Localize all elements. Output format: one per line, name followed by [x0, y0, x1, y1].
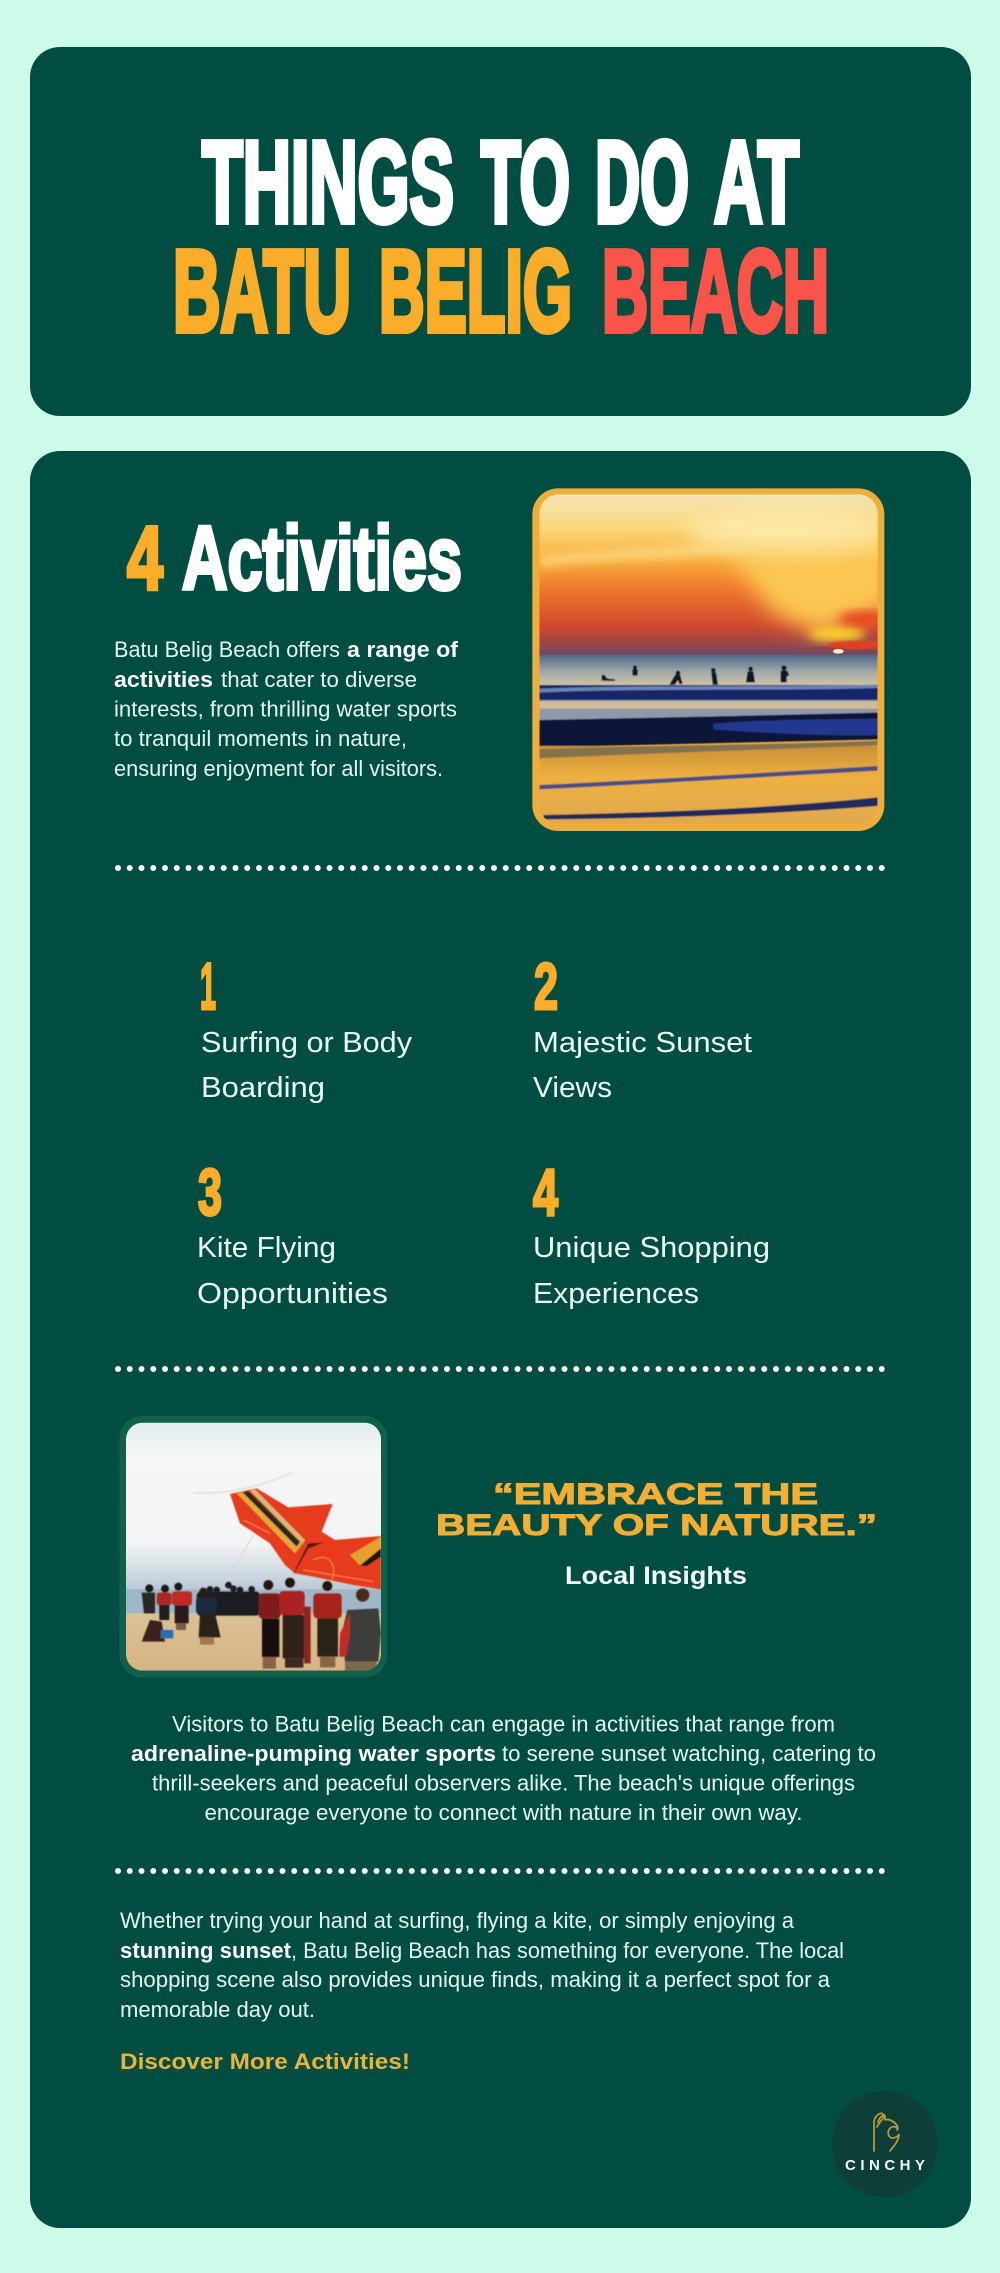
quote: BEAUTY OF NATURE.” — [436, 1509, 877, 1542]
closing paragraph — [120, 1908, 844, 2022]
activity 1 — [200, 949, 413, 1104]
photo: surfers at sunset — [532, 488, 900, 831]
centered paragraph — [131, 1712, 876, 1825]
intro paragraph: Batu Belig Beach offers — [114, 637, 340, 662]
centered paragraph: encourage everyone to connect with nature in their own way. — [204, 1800, 802, 1825]
crowd — [197, 1582, 260, 1616]
divider — [118, 1868, 883, 1874]
closing paragraph: memorable day out. — [120, 1997, 315, 2022]
activity 3: Kite Flying — [197, 1232, 336, 1264]
quote: “EMBRACE THE — [493, 1478, 818, 1511]
photo: kite flying — [119, 1416, 387, 1677]
surfers — [586, 665, 789, 685]
intro paragraph: a range of — [347, 637, 459, 662]
activity 1: Boarding — [201, 1072, 325, 1104]
activity 3: 3 — [198, 1155, 222, 1229]
intro paragraph: ensuring enjoyment for all visitors. — [114, 756, 443, 781]
activity 2 — [533, 949, 752, 1104]
icon: hand gesture — [874, 2113, 899, 2151]
panel: title — [30, 47, 971, 416]
quote source: Local Insights — [565, 1562, 747, 1590]
call to action: Discover More Activities! — [120, 2049, 410, 2074]
activity 4: Experiences — [533, 1278, 699, 1310]
activity 3: Opportunities — [197, 1278, 388, 1310]
activity 2: Majestic Sunset — [533, 1027, 752, 1059]
divider — [118, 865, 883, 871]
activity list — [197, 949, 770, 1310]
intro paragraph: that cater to diverse — [221, 667, 417, 692]
intro paragraph: activities — [114, 667, 213, 692]
activity 4: Unique Shopping — [533, 1232, 770, 1264]
heading: 4 activities — [127, 509, 462, 609]
title line 1: THINGS — [202, 117, 454, 247]
centered paragraph: thrill-seekers and peaceful observers alike. The beach's unique offerings — [152, 1770, 855, 1796]
closing paragraph: shopping scene also provides unique finds, making it a perfect spot for a — [120, 1967, 831, 1992]
logo: cinchy: CINCHY — [845, 2157, 925, 2174]
activity 4: 4 — [533, 1155, 558, 1229]
centered paragraph: to serene sunset watching, catering to — [502, 1741, 876, 1766]
title line 1: TO — [481, 117, 570, 247]
closing paragraph: stunning sunset — [120, 1938, 292, 1963]
heading: 4 activities: 4 — [127, 509, 163, 609]
centered paragraph: Visitors to Batu Belig Beach can engage in activities that range from — [172, 1712, 835, 1736]
logo: cinchy — [832, 2091, 938, 2197]
activity 2: 2 — [534, 949, 558, 1023]
closing paragraph: , Batu Belig Beach has something for everyone. The local — [291, 1938, 844, 1963]
title line 1: DO — [595, 117, 689, 247]
closing paragraph: Whether trying your hand at surfing, flying a kite, or simply enjoying a — [120, 1908, 795, 1933]
activity 2: Views — [533, 1072, 612, 1104]
heading: 4 activities: Activities — [182, 509, 462, 609]
quote — [436, 1478, 877, 1542]
activity 1: 1 — [200, 949, 216, 1023]
title line 2 gold: BELIG — [379, 226, 572, 356]
centered paragraph: adrenaline-pumping water sports — [131, 1741, 496, 1766]
intro paragraph — [114, 637, 459, 781]
title line 2 gold: BATU — [173, 226, 351, 356]
activity 1: Surfing or Body — [201, 1027, 413, 1059]
title line 1: AT — [714, 117, 799, 247]
intro paragraph: interests, from thrilling water sports — [114, 696, 457, 722]
kite — [193, 1473, 293, 1493]
activity 3 — [197, 1155, 388, 1310]
panel: main content — [30, 451, 971, 2228]
activity 4 — [533, 1155, 770, 1310]
divider — [118, 1366, 883, 1372]
intro paragraph: to tranquil moments in nature, — [114, 726, 407, 751]
